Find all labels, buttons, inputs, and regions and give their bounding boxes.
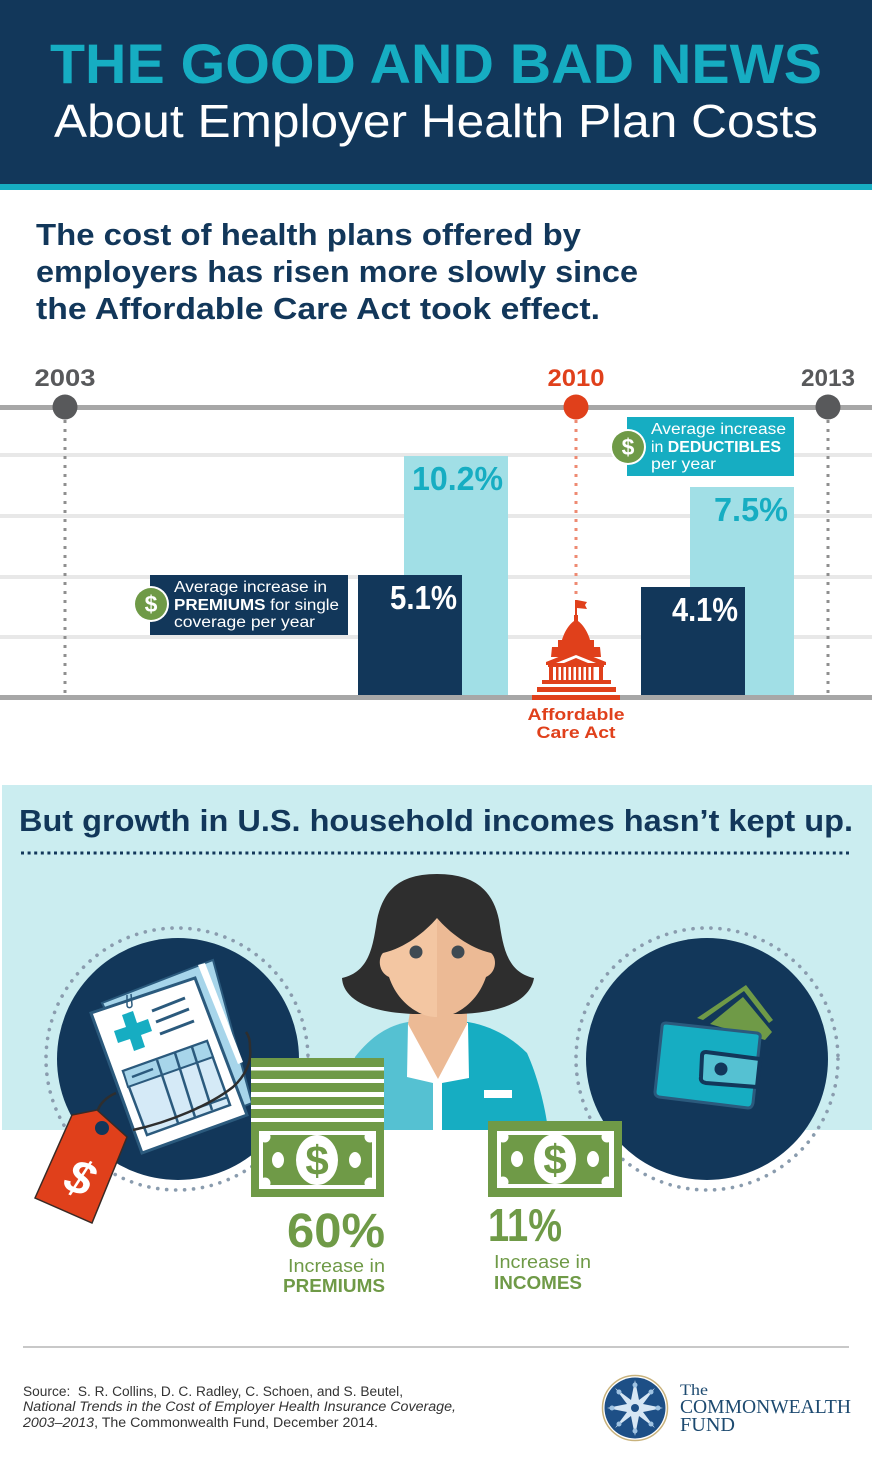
logo wordmark: The: [680, 1382, 708, 1399]
price tag: $: [57, 1149, 103, 1209]
year 2003 marker: [34, 365, 96, 420]
source text: Source: S. R. Collins, D. C. Radley, C. Schoen, and S. Beutel,: [23, 1384, 403, 1399]
name badge: [484, 1090, 512, 1098]
intro text block: [36, 217, 638, 326]
callout: deductibles: [610, 417, 794, 476]
logo wordmark: FUND: [680, 1414, 735, 1436]
year 2010 marker: 2010: [548, 365, 604, 392]
intro text block: the Affordable Care Act took effect.: [36, 291, 600, 326]
intro text block: employers has risen more slowly since: [36, 254, 638, 289]
logo wordmark: [680, 1382, 851, 1436]
year 2010 marker: [548, 365, 604, 420]
table: [123, 1041, 230, 1135]
medical cross: [114, 1011, 152, 1051]
bar: premiums before 2010, 5.1%: 5.1%: [390, 579, 457, 616]
title: THE GOOD AND BAD NEWS: [50, 32, 822, 95]
back pages: [102, 960, 252, 1135]
shirt collar: [407, 1023, 469, 1130]
stat: 60% increase in premiums: Increase in: [288, 1256, 385, 1276]
label: Affordable Care Act: [528, 705, 624, 742]
stat: 11% increase in incomes: INCOMES: [494, 1273, 582, 1293]
neck: [408, 1012, 467, 1079]
front page: [91, 978, 247, 1153]
header banner: [0, 0, 872, 190]
year 2013 marker: [801, 365, 855, 420]
label: Affordable Care Act: Affordable: [528, 705, 624, 724]
year 2013 marker: 2013: [801, 365, 855, 392]
panel: household incomes background: [2, 785, 872, 1130]
bar: premiums after 2010, 4.1%: 4.1%: [672, 591, 738, 628]
text lines: [152, 998, 194, 1034]
logo emblem: [602, 1376, 668, 1440]
icon: wallet circle: [576, 928, 838, 1190]
callout: premiums: coverage per year: [174, 614, 315, 631]
icon: capitol building: [532, 600, 620, 700]
icon: stack of money, premiums: $: [305, 1137, 329, 1184]
icon: stack of money, premiums: [251, 1058, 384, 1197]
stat: 60% increase in premiums: PREMIUMS: [283, 1276, 385, 1296]
callout: premiums: PREMIUMS for single: [174, 597, 339, 614]
bar: deductibles before 2010, 10.2%: 10.2%: [412, 460, 503, 497]
callout: deductibles: $: [622, 434, 635, 460]
callout: deductibles: Average increase: [651, 421, 786, 438]
intro text block: The cost of health plans offered by: [36, 217, 582, 252]
source text: National Trends in the Cost of Employer Health Insurance Coverage,: [23, 1399, 456, 1414]
illustration: woman: [340, 874, 548, 1130]
jacket: [340, 1022, 548, 1130]
logo wordmark: COMMONWEALTH: [680, 1396, 851, 1418]
subtitle: About Employer Health Plan Costs: [54, 95, 818, 147]
source text: 2003–2013 , The Commonwealth Fund, December 2014.: [22, 1415, 378, 1430]
callout: premiums: Average increase in: [174, 579, 327, 596]
bar: deductibles after 2010, 7.5%: 7.5%: [714, 491, 788, 528]
string: [96, 1032, 250, 1130]
bar: premiums before 2010, 5.1%: [358, 575, 462, 695]
stat: 11% increase in incomes: 11%: [488, 1199, 562, 1251]
face: [380, 918, 495, 1017]
banknote: [697, 985, 773, 1023]
hair: [342, 874, 534, 1014]
heading: household incomes: But growth in U.S. household incomes hasn’t kept up.: [19, 803, 853, 838]
callout: deductibles: in DEDUCTIBLES: [651, 439, 781, 456]
bar: deductibles before 2010, 10.2%: [404, 456, 508, 695]
stat: 60% increase in premiums: [283, 1205, 385, 1296]
stat: 11% increase in incomes: Increase in: [494, 1252, 591, 1272]
callout: premiums: [133, 575, 348, 635]
icon: banknote, incomes: [488, 1121, 622, 1197]
price tag: [35, 1110, 127, 1223]
year 2003 marker: 2003: [34, 365, 96, 392]
wallet body: [655, 1023, 760, 1108]
stat: 11% increase in incomes: [488, 1199, 591, 1293]
label: Affordable Care Act: Care Act: [536, 723, 616, 742]
wallet clasp: [701, 1052, 760, 1087]
bar: premiums after 2010, 4.1%: [641, 587, 745, 695]
eyes: [410, 946, 464, 958]
stat: 60% increase in premiums: 60%: [287, 1205, 385, 1258]
callout: deductibles: per year: [651, 456, 716, 473]
icon: banknote, incomes: $: [543, 1136, 567, 1183]
timeline bar chart: [0, 365, 872, 742]
callout: premiums: $: [145, 591, 158, 617]
logo: The Commonwealth Fund: [602, 1376, 851, 1440]
paper clip: [127, 994, 132, 1008]
bar: deductibles after 2010, 7.5%: [690, 487, 794, 695]
icon: medical bills circle: [35, 928, 308, 1223]
source text: [22, 1384, 456, 1430]
